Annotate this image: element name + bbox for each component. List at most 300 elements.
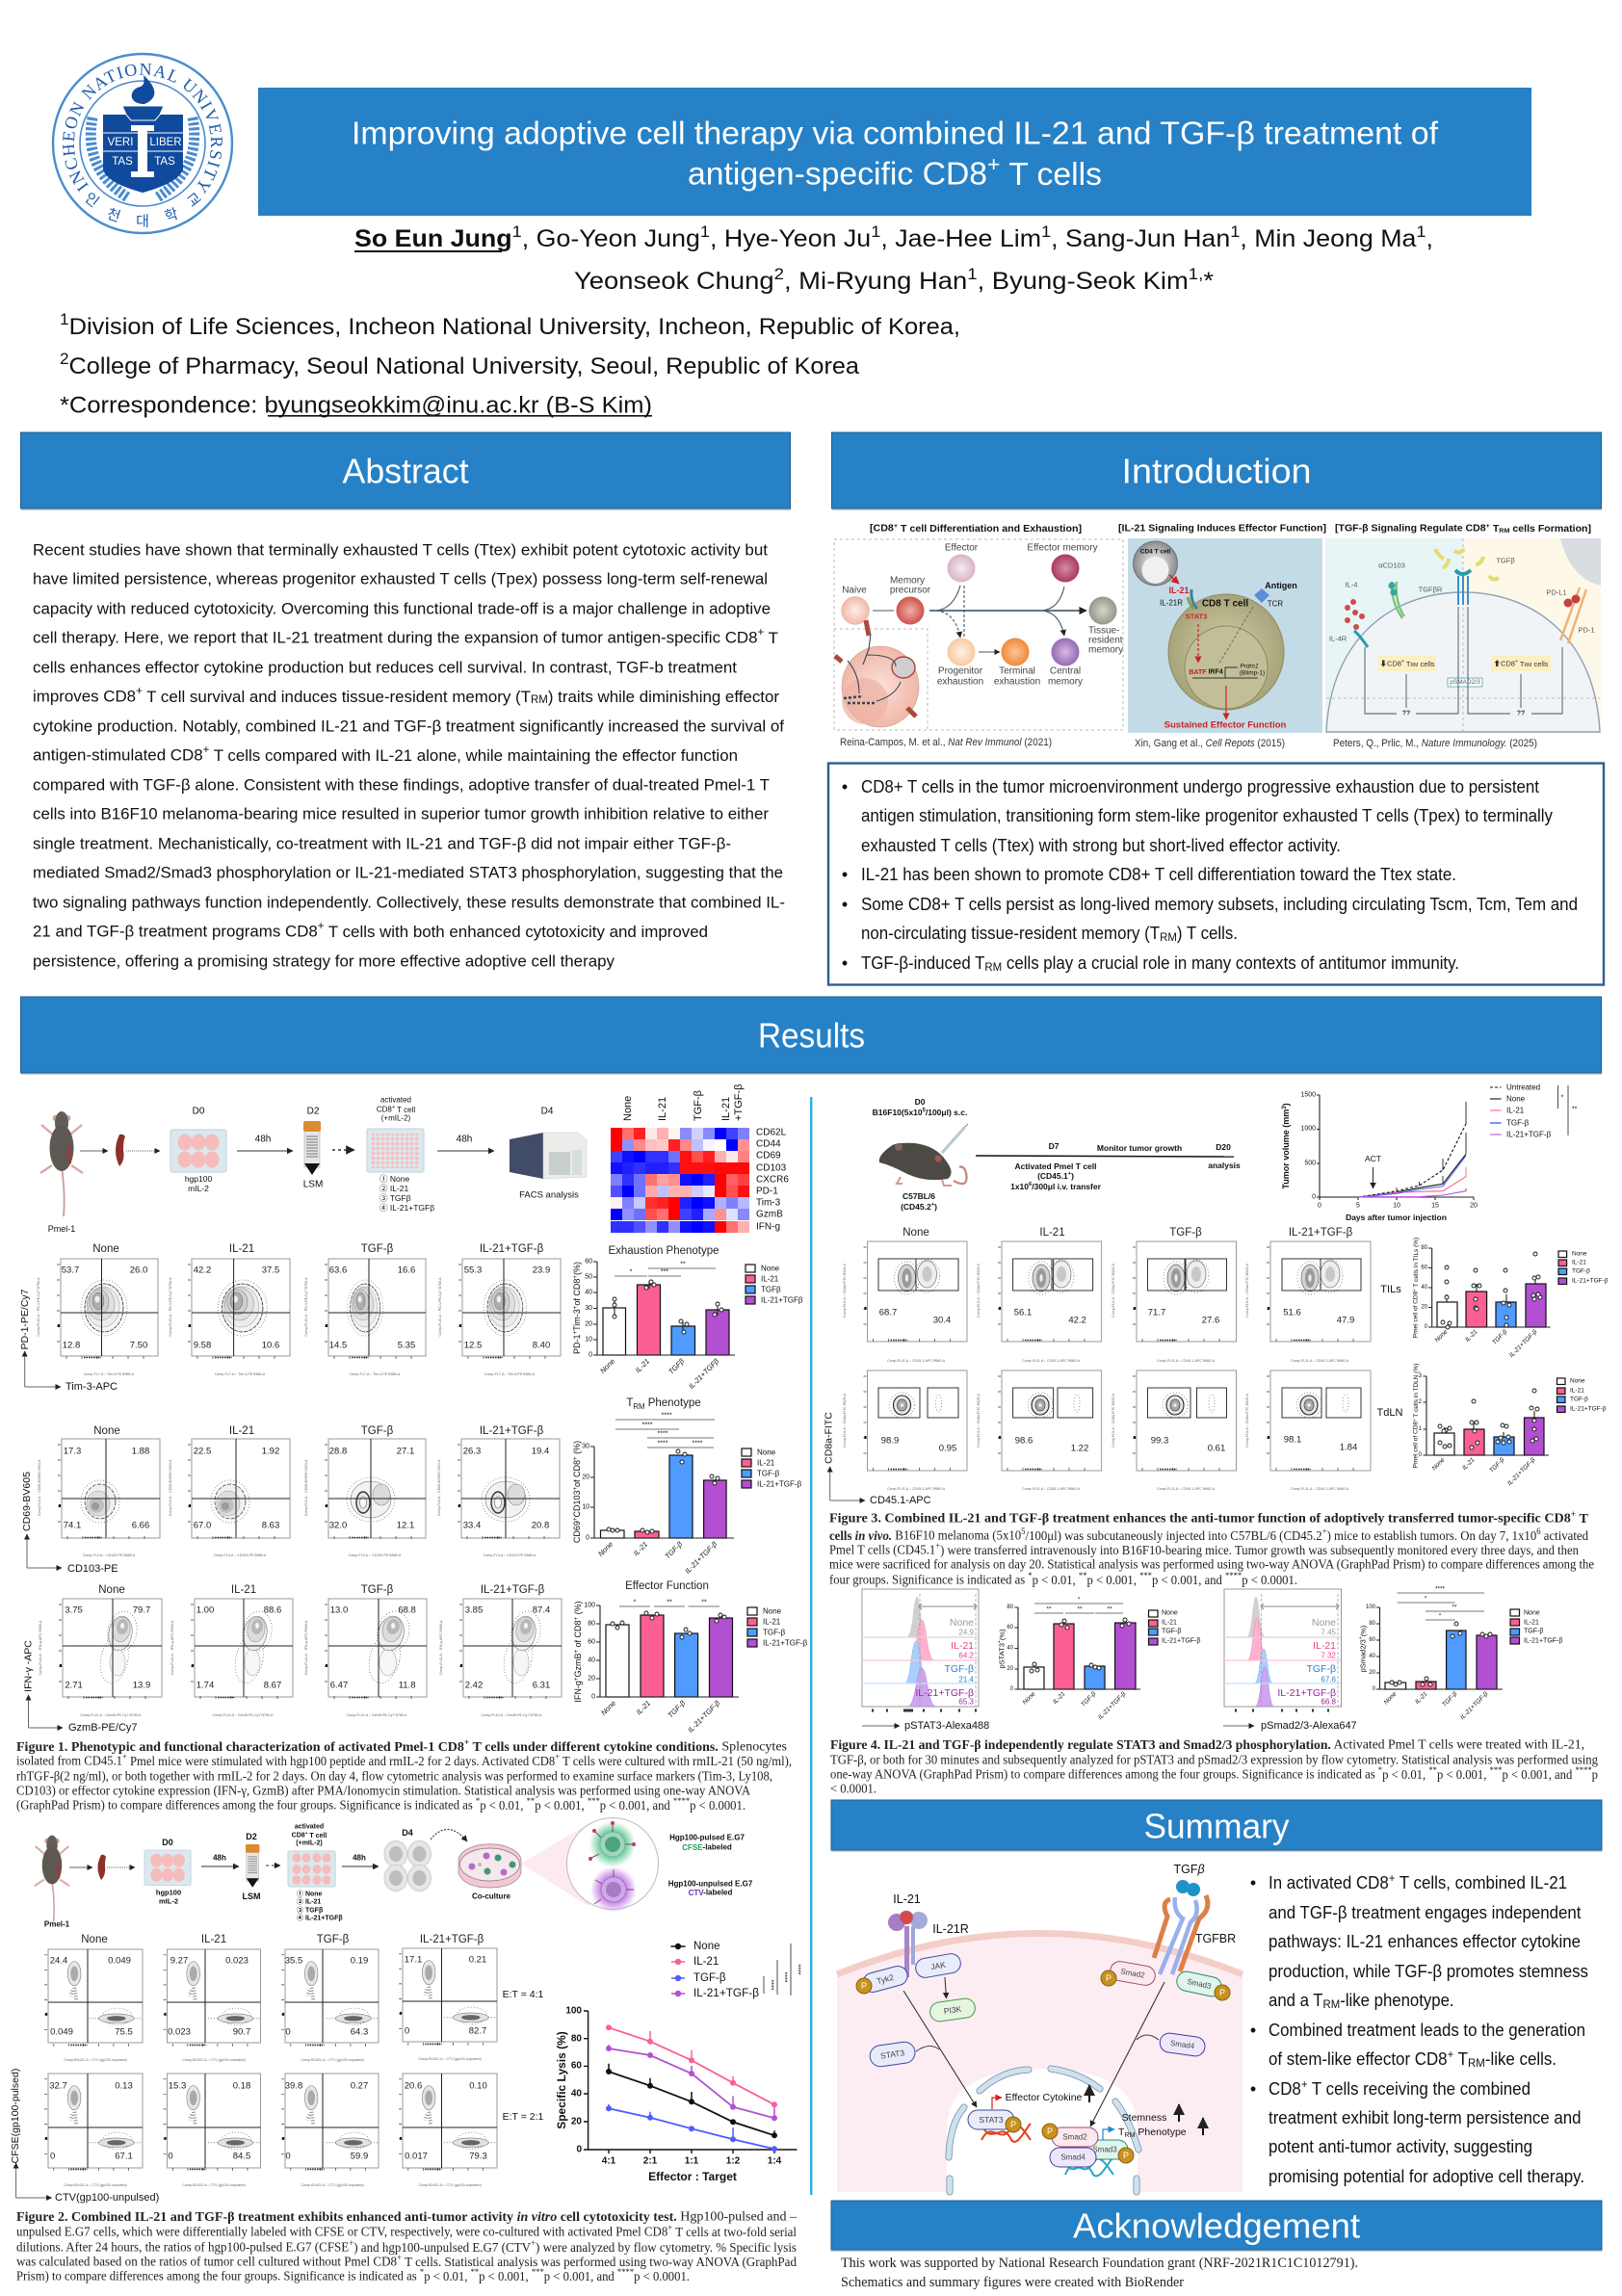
- flow cytometry grid: CFSE vs CTV: IL-21+TGF-β: [420, 1934, 484, 1945]
- flow cytometry row: IFN-gamma vs GzmB: Comp-FL10-A :: GzmB-PE-Cy7 B780-A: [81, 1713, 142, 1717]
- panel: introduction bullet points: IL-21 has been shown to promote CD8+ T cell differentiation toward the Ttex state.: [861, 865, 1456, 884]
- bar chart: Pmel cells in TdLN: TGF-β: [1570, 1396, 1588, 1402]
- authors: So Eun Jung: [354, 225, 512, 252]
- bar chart: TRM phenotype: IL-21: [757, 1458, 775, 1468]
- figure 2 schematic: 48h: [213, 1853, 226, 1863]
- bar chart: pSmad2/3: *: [1439, 1612, 1442, 1620]
- bar chart: exhaustion phenotype: None: [598, 1357, 616, 1375]
- figure 1 caption: CD103) or effector cytokine expression (IFN-γ, GzmB) after PMA/Ionomycin stimulation. Statistical analysis was performed using one-way ANOVA: [16, 1784, 751, 1799]
- flow cytometry grid: CFSE vs CTV: Comp-BV421-A :: CTV (gp100-unpulsed): [301, 2058, 364, 2062]
- bar chart: effector function: IFN-g: [573, 1681, 583, 1703]
- figure 1 caption: +: [555, 1753, 560, 1762]
- phospho marker: P: [861, 1981, 867, 1991]
- flow cytometry grid: CD8a vs CD45.1 gates: TGF-β: [1169, 1227, 1202, 1239]
- bar chart: pSmad2/3: IL-21+TGF-β: [1459, 1690, 1490, 1721]
- line chart: specific lysis: 1:2: [726, 2155, 741, 2167]
- authors: , Go-Yeon Jung: [522, 225, 700, 252]
- authors: [354, 222, 1433, 295]
- bar chart: effector function: +: [572, 1650, 580, 1654]
- bar chart: Pmel cells in TILs: TGF-β: [1491, 1328, 1509, 1346]
- heatmap: TGF-β: [693, 1090, 704, 1121]
- figure 3 schematic: (CD45.2: [901, 1202, 931, 1212]
- flow cytometry row: PD-1 vs Tim-3: 37.5: [262, 1265, 279, 1275]
- bar chart: Pmel cells in TILs: +: [1412, 1289, 1416, 1292]
- figure 3 caption: 6: [1536, 1527, 1541, 1537]
- line chart: specific lysis: IL-21: [693, 1956, 719, 1968]
- intro panel: TGF-beta signaling diagram: +: [1401, 659, 1404, 665]
- figure 3 caption: p < 0.0001.: [1242, 1574, 1297, 1587]
- line chart: tumor volume: Days after tumor injection: [1346, 1213, 1447, 1222]
- line chart: tumor volume: 10: [1393, 1202, 1400, 1210]
- bar chart: exhaustion phenotype: TGFβ: [761, 1285, 781, 1294]
- flow cytometry grid: CFSE vs CTV: 17.1: [405, 1955, 422, 1965]
- bar chart: Pmel cells in TdLN: 1: [1419, 1426, 1423, 1432]
- heatmap: CD103: [756, 1163, 787, 1173]
- figure 3 schematic: /100μl) s.c.: [926, 1108, 967, 1117]
- flow cytometry row: IFN-gamma vs GzmB: 3.85: [465, 1605, 483, 1616]
- flow cytometry row: CD69 vs CD103: 67.0: [194, 1520, 211, 1531]
- flow cytometry row: IFN-gamma vs GzmB: Comp-FL11-A :: IFN-g-APC R660-A: [439, 1620, 443, 1675]
- flow cytometry row: IFN-gamma vs GzmB: 1.74: [196, 1680, 214, 1691]
- heading: Results: [21, 997, 1602, 1075]
- flow cytometry grid: CD8a vs CD45.1 gates: Comp-FL5-A :: CD8a-FITC B525-A: [977, 1264, 981, 1318]
- summary bullet points: production, while TGF-β promotes stemness: [1269, 1962, 1588, 1981]
- figure 3 caption: four groups. Significance is indicated as: [829, 1574, 1046, 1587]
- affiliations and correspondence: 2: [60, 351, 69, 368]
- abstract text: ) traits while diminishing effector: [548, 688, 779, 705]
- flow cytometry grid: CD8a vs CD45.1 gates: Comp-FL11-A :: CD45.1-APC R660-A: [1022, 1487, 1081, 1491]
- summary bullet points: In activated CD8: [1269, 1873, 1397, 1892]
- bar chart: pSTAT3: 80: [1007, 1605, 1014, 1610]
- bar chart: TRM phenotype: +: [572, 1456, 578, 1460]
- intro panel: IL-21 signaling diagram: CD8 T cell: [1202, 599, 1248, 609]
- line chart: tumor volume: None: [1506, 1094, 1526, 1104]
- flow cytometry grid: CFSE vs CTV: 59.9: [351, 2152, 368, 2161]
- line chart: tumor volume: 0: [1318, 1202, 1321, 1210]
- heatmap: CD62L: [756, 1127, 787, 1138]
- intro panel: TGF-beta signaling diagram: [1325, 538, 1601, 732]
- flow cytometry grid: CFSE vs CTV: 75.5: [115, 2026, 133, 2038]
- figure 1 schematic: mIL-2: [188, 1184, 209, 1193]
- figure 1 caption: +: [122, 1753, 127, 1762]
- flow cytometry grid: CFSE vs CTV: E:T = 2:1: [503, 2111, 544, 2123]
- figure 2 schematic: Co-culture: [472, 1892, 511, 1901]
- line chart: tumor volume: [1281, 1083, 1578, 1222]
- flow cytometry grid: CFSE vs CTV: 0.10: [469, 2080, 487, 2092]
- summary bullet points: pathways: IL-21 enhances effector cytokine: [1269, 1932, 1581, 1951]
- bar chart: Pmel cells in TdLN: [1412, 1364, 1607, 1487]
- figure 3 schematic: Monitor tumor growth: [1097, 1143, 1182, 1153]
- flow cytometry grid: CFSE vs CTV: 0.049: [50, 2026, 73, 2038]
- intro panel: TGF-beta signaling diagram: αCD103: [1378, 561, 1405, 570]
- intro panel: TGF-beta signaling diagram: PD-L1: [1546, 587, 1567, 597]
- logo: Incheon National University seal: [52, 52, 233, 235]
- flow cytometry grid: CFSE vs CTV: 0.023: [168, 2026, 191, 2038]
- panel: introduction bullet points: •: [842, 895, 848, 914]
- figure 2 schematic: (+mIL-2): [296, 1839, 323, 1847]
- line chart: specific lysis: 1:4: [768, 2155, 782, 2167]
- bar chart: pSTAT3: [997, 1597, 1200, 1721]
- intro panel: IL-21 signaling diagram: CD4 T cell: [1140, 549, 1170, 555]
- intro figure headings: [TGF-β Signaling Regulate CD8: [1335, 524, 1478, 534]
- line chart: tumor volume: *: [1561, 1094, 1564, 1102]
- heatmap: None: [622, 1096, 634, 1121]
- phospho marker: [1042, 2124, 1058, 2139]
- nuclear Smad4 pill: Smad4: [1060, 2153, 1086, 2161]
- figure 2 schematic: [35, 1818, 753, 1928]
- bar chart: Pmel cells in TdLN: IL-21+TGF-β: [1506, 1456, 1537, 1487]
- flow cytometry grid: CFSE vs CTV: 32.7: [49, 2080, 67, 2092]
- figure 3 schematic: D7: [1049, 1141, 1060, 1151]
- figure 3 schematic: D20: [1216, 1142, 1231, 1152]
- bar chart: exhaustion phenotype: PD-1: [572, 1334, 582, 1354]
- figure 1 caption: *: [476, 1797, 480, 1807]
- line chart: specific lysis: 20: [571, 2117, 582, 2126]
- flow cytometry grid: CD8a vs CD45.1 gates: Comp-FL5-A :: CD8a-FITC B525-A: [1112, 1394, 1115, 1448]
- figure 3 caption: +: [1322, 1527, 1327, 1537]
- summary bullet points: and a T: [1269, 1991, 1327, 2010]
- flow cytometry grid: CFSE vs CTV: 39.8: [285, 2080, 302, 2092]
- intro panel: IL-21 signaling diagram: (Blimp-1): [1240, 670, 1265, 676]
- abstract text: +: [203, 744, 210, 756]
- Tyk2 pill: Tyk2: [876, 1972, 895, 1986]
- figure 3 caption: ***: [1139, 1572, 1152, 1581]
- intro figure headings: RM: [1499, 528, 1510, 534]
- figure 1 schematic: Pmel-1: [48, 1224, 75, 1234]
- intro panel: T cell differentiation diagram: Tissue-: [1088, 626, 1119, 636]
- intro figure headings: [CD8: [870, 524, 892, 534]
- summary bullet points: •: [1250, 2079, 1256, 2099]
- line chart: tumor volume: 5: [1356, 1202, 1360, 1210]
- panel: introduction bullet points: exhausted T cells (Ttex) with strong but short-lived effector activity.: [861, 836, 1341, 855]
- flow cytometry row: IFN-gamma vs GzmB: [23, 1584, 562, 1734]
- phospho marker: [856, 1978, 872, 1994]
- line chart: specific lysis: TGF-β: [693, 1972, 726, 1984]
- panel: introduction bullet points: cells play a crucial role in many contexts of antitumor immunity.: [1002, 953, 1459, 973]
- line chart: tumor volume: **: [1572, 1106, 1578, 1113]
- flow cytometry row: PD-1 vs Tim-3: Comp-FL10-A :: PD-1-PE-Cy7 B780-A: [304, 1277, 308, 1337]
- figure 3 caption: +: [935, 1542, 940, 1552]
- flow cytometry grid: CD8a vs CD45.1 gates: Comp-FL5-A :: CD8a-FITC B525-A: [843, 1264, 847, 1318]
- phospho marker: [1006, 2117, 1021, 2132]
- flow cytometry row: IFN-gamma vs GzmB: Comp-FL11-A :: IFN-g-APC R660-A: [304, 1620, 308, 1675]
- flow cytometry grid: CD8a vs CD45.1 gates: 98.9: [881, 1435, 899, 1447]
- histogram: pSmad2/3: [1223, 1589, 1357, 1732]
- bar chart: effector function: of CD8: [573, 1620, 583, 1650]
- summary bullet points: T cells, combined IL-21: [1395, 1873, 1567, 1892]
- flow cytometry grid: CFSE vs CTV: Comp-BV421-A :: CTV (gp100-unpulsed): [301, 2183, 364, 2187]
- flow cytometry row: CD69 vs CD103: Comp-FL3-A :: CD103-PE B585-A: [349, 1553, 402, 1557]
- figure 3 schematic: /300μl i.v. transfer: [1032, 1182, 1102, 1191]
- flow cytometry grid: CD8a vs CD45.1 gates: 47.9: [1337, 1316, 1354, 1325]
- intro panel: TGF-beta signaling diagram: IL-4: [1346, 580, 1357, 589]
- flow cytometry grid: CFSE vs CTV: 15.3: [169, 2080, 186, 2092]
- authors: 1: [1041, 222, 1051, 241]
- flow cytometry grid: CFSE vs CTV: Comp-BV421-A :: CTV (gp100-unpulsed): [418, 2183, 482, 2187]
- intro panel: TGF-beta signaling diagram: TGFβR: [1419, 586, 1443, 593]
- authors: 2: [774, 264, 784, 283]
- flow cytometry row: IFN-gamma vs GzmB: 11.8: [399, 1680, 415, 1691]
- summary bullet points: •: [1250, 1873, 1256, 1892]
- authors: 1: [1416, 222, 1426, 241]
- bar chart: effector function: Effector Function: [625, 1580, 709, 1592]
- line chart: tumor volume: TGF-β: [1506, 1119, 1530, 1127]
- figure 1 schematic: FACS analysis: [519, 1190, 579, 1200]
- intro panel: TGF-beta signaling diagram: PD-1: [1578, 626, 1595, 634]
- abstract text: persistence, offering a promising strategy for more effective adoptive cell therapy: [33, 952, 615, 971]
- bar chart: Pmel cells in TdLN: IL-21+TGF-β: [1570, 1406, 1607, 1412]
- line chart: specific lysis: IL-21+TGF-β: [693, 1988, 759, 1999]
- heading: Abstract: Abstract: [343, 451, 468, 491]
- figure 1 schematic: hgp100: [185, 1174, 212, 1184]
- bar chart: TRM phenotype: None: [757, 1448, 776, 1456]
- flow cytometry grid: CD8a vs CD45.1 gates: Comp-FL5-A :: CD8a-FITC B525-A: [1112, 1264, 1115, 1318]
- histogram: pSmad2/3: pSmad2/3-Alexa647: [1261, 1720, 1357, 1732]
- bar chart: Pmel cells in TILs: 60: [1421, 1265, 1428, 1271]
- figure 1 caption: Splenocytes: [721, 1739, 787, 1755]
- flow cytometry grid: CD8a vs CD45.1 gates: [824, 1227, 1403, 1506]
- flow cytometry grid: CFSE vs CTV: 0.27: [351, 2080, 368, 2092]
- flow cytometry row: CD69 vs CD103: 1.88: [132, 1447, 149, 1456]
- line chart: tumor volume: 1000: [1300, 1125, 1316, 1133]
- bar chart: exhaustion phenotype: (%): [572, 1262, 582, 1275]
- flow cytometry row: PD-1 vs Tim-3: IL-21+TGF-β: [480, 1243, 544, 1255]
- logo: Incheon National University seal: 인: [81, 190, 102, 211]
- bar chart: TRM phenotype: IL-21: [632, 1540, 649, 1557]
- summary bullet points: •: [1250, 2021, 1256, 2040]
- logo: Incheon National University seal: 대: [136, 214, 149, 229]
- flow cytometry row: IFN-gamma vs GzmB: 87.4: [533, 1605, 550, 1616]
- bar chart: exhaustion phenotype: Tim-3: [572, 1309, 582, 1331]
- bar chart: pSmad2/3: None: [1383, 1690, 1399, 1706]
- flow cytometry grid: CFSE vs CTV: 0.21: [469, 1955, 486, 1965]
- flow cytometry row: PD-1 vs Tim-3: Comp-FL7-A :: Tim-3-PE B585-A: [484, 1372, 536, 1376]
- intro panel: IL-21 signaling diagram: Prdm1: [1240, 663, 1259, 670]
- summary bullet points: RM: [1468, 2056, 1485, 2070]
- intro panel: TGF-beta signaling diagram: RM: [1525, 663, 1531, 668]
- bar chart: exhaustion phenotype: 30: [585, 1305, 592, 1312]
- logo: Incheon National University seal: 천: [105, 206, 122, 225]
- flow cytometry grid: CD8a vs CD45.1 gates: IL-21: [1039, 1227, 1065, 1239]
- flow cytometry grid: CFSE vs CTV: None: [81, 1934, 108, 1945]
- bar chart: pSTAT3: (%): [998, 1629, 1006, 1640]
- heading: Introduction: [832, 432, 1602, 510]
- bar chart: TRM phenotype: T: [626, 1397, 633, 1409]
- logo: Incheon National University seal: VERI: [108, 137, 133, 148]
- intro panel: TGF-beta signaling diagram: RM: [1411, 663, 1418, 668]
- flow cytometry grid: CD8a vs CD45.1 gates: 1.84: [1340, 1443, 1357, 1452]
- summary diagram: signaling pathways: Effector Cytokine: [1006, 2092, 1083, 2103]
- acknowledgement text: This work was supported by National Research Foundation grant (NRF-2021R1C1C1012791).: [841, 2256, 1358, 2271]
- bar chart: pSmad2/3: 100: [1366, 1605, 1376, 1610]
- flow cytometry row: PD-1 vs Tim-3: 12.8: [63, 1341, 80, 1350]
- line chart: specific lysis: 4:1: [602, 2155, 616, 2167]
- phospho marker: [1118, 2148, 1134, 2163]
- figure 1 caption: isolated from CD45.1: [16, 1755, 134, 1768]
- intro figure headings: [IL-21 Signaling Induces Effector Function]: [1118, 524, 1326, 534]
- summary diagram: signaling pathways: TGFβ: [1174, 1863, 1205, 1876]
- bar chart: effector function: 80: [588, 1620, 595, 1628]
- flow cytometry grid: CD8a vs CD45.1 gates: Comp-FL11-A :: CD45.1-APC R660-A: [1291, 1487, 1349, 1491]
- intro panel: IL-21 signaling diagram: IL-21: [1168, 586, 1190, 595]
- bar chart: pSTAT3: **: [1077, 1606, 1083, 1612]
- figure 3 caption: *: [1028, 1572, 1033, 1581]
- flow cytometry grid: CFSE vs CTV: 0: [405, 2026, 409, 2036]
- intro image citations: [840, 737, 1537, 749]
- summary diagram: signaling pathways: IL-21R: [932, 1922, 969, 1936]
- flow cytometry row: IFN-gamma vs GzmB: 8.67: [264, 1680, 281, 1691]
- figure 1 schematic: +: [392, 1105, 395, 1110]
- intro panel: IL-21 signaling diagram: Antigen: [1265, 581, 1297, 590]
- flow cytometry grid: CFSE vs CTV: CFSE(gp100-pulsed): [10, 2069, 21, 2163]
- abstract text: +: [318, 921, 325, 932]
- figure 1 schematic: 48h: [255, 1135, 271, 1144]
- logo: Incheon National University seal: 교: [184, 190, 205, 211]
- figure 2 caption: ) and hgp100-unpulsed E.G7 (CTV: [353, 2240, 531, 2256]
- flow cytometry row: IFN-gamma vs GzmB: TGF-β: [361, 1584, 394, 1596]
- bar chart: Pmel cells in TdLN: IL-21: [1461, 1456, 1477, 1472]
- flow cytometry row: CD69 vs CD103: 22.5: [194, 1447, 211, 1456]
- bar chart: TRM phenotype: IL-21+TGF-β: [683, 1539, 719, 1576]
- flow cytometry grid: CFSE vs CTV: E:T = 4:1: [503, 1989, 544, 2000]
- flow cytometry row: CD69 vs CD103: 26.3: [463, 1447, 481, 1456]
- flow cytometry grid: CD8a vs CD45.1 gates: 56.1: [1014, 1308, 1032, 1318]
- bar chart: exhaustion phenotype: ***: [661, 1269, 668, 1275]
- intro panel: T cell differentiation diagram: exhaustion: [937, 676, 983, 688]
- bar chart: pSmad2/3: None: [1524, 1610, 1540, 1616]
- phospho marker: P: [1123, 2151, 1129, 2160]
- bar chart: effector function: IL-21+TGF-β: [686, 1698, 722, 1735]
- bar chart: TRM phenotype: ****: [642, 1422, 653, 1429]
- figure 3 schematic: B16F10(5x10: [873, 1108, 923, 1117]
- flow cytometry row: IFN-gamma vs GzmB: 68.8: [398, 1605, 416, 1616]
- histogram: pSTAT3: 65.3: [958, 1697, 975, 1707]
- figure 1 caption: [16, 1738, 792, 1813]
- figure 3 schematic: Activated Pmel T cell: [1014, 1161, 1097, 1171]
- panel: introduction bullet points: CD8+ T cells in the tumor microenvironment undergo progressive exhaustion due to persistent: [861, 777, 1539, 796]
- flow cytometry grid: CFSE vs CTV: 9.27: [170, 1955, 188, 1967]
- figure 2 caption: T cells. Statistical analysis was performed using two-way ANOVA (GraphPad: [402, 2256, 797, 2269]
- bar chart: exhaustion phenotype: 60: [585, 1258, 592, 1265]
- figure 3 schematic: (CD45.1: [1037, 1171, 1068, 1181]
- heading: Summary: Summary: [1144, 1807, 1289, 1845]
- figure 3 caption: **: [1079, 1572, 1087, 1581]
- heading: Results: Results: [758, 1015, 865, 1056]
- figure 3 caption: p < 0.01,: [1033, 1574, 1079, 1587]
- flow cytometry row: CD69 vs CD103: CD103-PE: [67, 1563, 118, 1575]
- figure 2 caption: +: [531, 2239, 536, 2249]
- heading: Abstract: [21, 432, 791, 510]
- abstract text: cytokine production. Notably, combined IL-21 and TGF-β treatment significantly increased the survival of: [33, 717, 784, 736]
- bar chart: effector function: +: [572, 1616, 580, 1620]
- figure 1 schematic: (+mIL-2): [381, 1113, 411, 1123]
- flow cytometry row: CD69 vs CD103: 74.1: [64, 1520, 81, 1531]
- figure 1 caption: (GraphPad Prism) to compare differences among the four groups. Significance is indicated as: [16, 1799, 520, 1813]
- bar chart: pSTAT3: TGF-β: [1162, 1628, 1181, 1635]
- bar chart: Pmel cells in TdLN: +: [1412, 1419, 1416, 1422]
- Tyk2 pill: [861, 1964, 909, 1995]
- bar chart: pSTAT3: IL-21+TGF-β: [1097, 1690, 1128, 1721]
- figure 3 caption: [829, 1510, 1594, 1587]
- abstract text: single treatment. Mechanistically, co-treatment with IL-21 and TGF-β did not impair either TGF-β-: [33, 834, 731, 853]
- flow cytometry row: CD69 vs CD103: 33.4: [463, 1520, 481, 1531]
- bar chart: pSmad2/3: *: [1425, 1595, 1427, 1603]
- affiliations and correspondence: 1: [60, 311, 69, 328]
- bar chart: Pmel cells in TILs: Pmel cell of CD8: [1412, 1292, 1420, 1338]
- line chart: specific lysis: 1:1: [685, 2155, 699, 2167]
- affiliations and correspondence: *Correspondence: byungseokkim@inu.ac.kr (B-S Kim): [60, 393, 652, 418]
- flow cytometry row: IFN-gamma vs GzmB: Comp-FL10-A :: GzmB-PE-Cy7 B780-A: [482, 1713, 542, 1717]
- logo: Incheon National University seal: TAS: [112, 156, 133, 168]
- intro panel: TGF-beta signaling diagram: ⬇CD8: [1379, 659, 1401, 668]
- flow cytometry grid: CD8a vs CD45.1 gates: Comp-FL11-A :: CD45.1-APC R660-A: [1157, 1359, 1216, 1363]
- abstract text: cell therapy. Here, we report that IL-21 treatment during the expansion of tumor antigen-specific CD8: [33, 628, 762, 647]
- bar chart: effector function: **: [701, 1599, 707, 1606]
- summary bullet points: treatment exhibit long-term persistence and: [1269, 2108, 1582, 2127]
- figure 3 caption: ) mice to establish tumors. On day 7, 1x10: [1327, 1529, 1536, 1543]
- histogram: pSTAT3: 64.2: [958, 1651, 975, 1660]
- figure 2 schematic: ③ TGFβ: [297, 1907, 324, 1915]
- flow cytometry grid: CFSE vs CTV: 0.18: [233, 2080, 250, 2092]
- intro panel: T cell differentiation diagram: memory: [1048, 676, 1083, 688]
- figure 2 schematic: +: [305, 1832, 308, 1836]
- figure 2 caption: p < 0.001,: [479, 2269, 532, 2284]
- flow cytometry grid: CFSE vs CTV: Comp-BV421-A :: CTV (gp100-unpulsed): [64, 2183, 127, 2187]
- figure 3 caption: p < 0.001, and: [1152, 1574, 1225, 1587]
- abstract text: cells enhances effector cytokine production but reduces cell survival. In contrast, TGF-b treatment: [33, 659, 737, 676]
- flow cytometry grid: CFSE vs CTV: 35.5: [285, 1955, 302, 1967]
- bar chart: Pmel cells in TILs: IL-21+TGF-β: [1508, 1328, 1539, 1359]
- flow cytometry row: CD69 vs CD103: 20.8: [532, 1520, 549, 1531]
- bar chart: pSTAT3: TGF-β: [1080, 1690, 1098, 1709]
- figure 2 schematic: D2: [246, 1832, 257, 1841]
- flow cytometry row: IFN-gamma vs GzmB: Comp-FL10-A :: GzmB-PE-Cy7 B780-A: [213, 1713, 274, 1717]
- flow cytometry row: IFN-gamma vs GzmB: 1.00: [196, 1605, 214, 1616]
- histogram: pSmad2/3: IL-21+TGF-β: [1277, 1687, 1336, 1699]
- flow cytometry grid: CFSE vs CTV: 79.3: [469, 2152, 487, 2161]
- figure 1 schematic: ② IL-21: [379, 1184, 409, 1193]
- bar chart: Pmel cells in TILs: TGF-β: [1572, 1267, 1590, 1275]
- flow cytometry row: IFN-gamma vs GzmB: GzmB-PE/Cy7: [68, 1722, 138, 1734]
- figure 2 schematic: Hgp100-unpulsed E.G7: [668, 1880, 753, 1888]
- summary bullet points: [1250, 1871, 1588, 2186]
- bar chart: effector function: 100: [584, 1603, 595, 1608]
- bar chart: TRM phenotype: None: [596, 1540, 615, 1558]
- flow cytometry grid: CD8a vs CD45.1 gates: Comp-FL11-A :: CD45.1-APC R660-A: [887, 1359, 946, 1363]
- flow cytometry row: PD-1 vs Tim-3: 53.7: [62, 1265, 79, 1275]
- acknowledgement text: Schematics and summary figures were created with BioRender: [841, 2275, 1184, 2290]
- bar chart: pSTAT3: *: [1078, 1597, 1081, 1603]
- bar chart: TRM phenotype: IL-21+TGF-β: [757, 1479, 802, 1489]
- flow cytometry row: IFN-gamma vs GzmB: Comp-FL11-A :: IFN-g-APC R660-A: [39, 1620, 42, 1675]
- figure 3 schematic: ): [934, 1202, 937, 1212]
- flow cytometry row: CD69 vs CD103: [21, 1425, 560, 1575]
- title banner: [258, 88, 1531, 216]
- nuclear Smad2 pill: Smad2: [1062, 2132, 1087, 2142]
- intro figure headings: T cell Differentiation and Exhaustion]: [898, 524, 1082, 534]
- summary diagram: signaling pathways: Phenotype: [1136, 2126, 1187, 2138]
- figure 1 caption: p < 0.001,: [535, 1799, 588, 1813]
- panel: introduction bullet points: antigen stimulation, transitioning form stem-like progenitor exhausted T cells (Tpex) to terminally: [861, 806, 1553, 825]
- flow cytometry row: PD-1 vs Tim-3: 23.9: [533, 1265, 550, 1275]
- flow cytometry grid: CFSE vs CTV: 0.19: [351, 1955, 368, 1967]
- flow cytometry row: PD-1 vs Tim-3: 8.40: [533, 1341, 550, 1350]
- intro panel: TGF-beta signaling diagram: pSMAD2/3: [1450, 679, 1480, 686]
- flow cytometry row: PD-1 vs Tim-3: None: [92, 1243, 119, 1255]
- flow cytometry row: CD69 vs CD103: Comp-FL5-A :: CD69-BV605 V610-A: [38, 1459, 41, 1516]
- figure 1 schematic: D0: [193, 1106, 205, 1117]
- figure 2 schematic: LSM: [243, 1892, 260, 1901]
